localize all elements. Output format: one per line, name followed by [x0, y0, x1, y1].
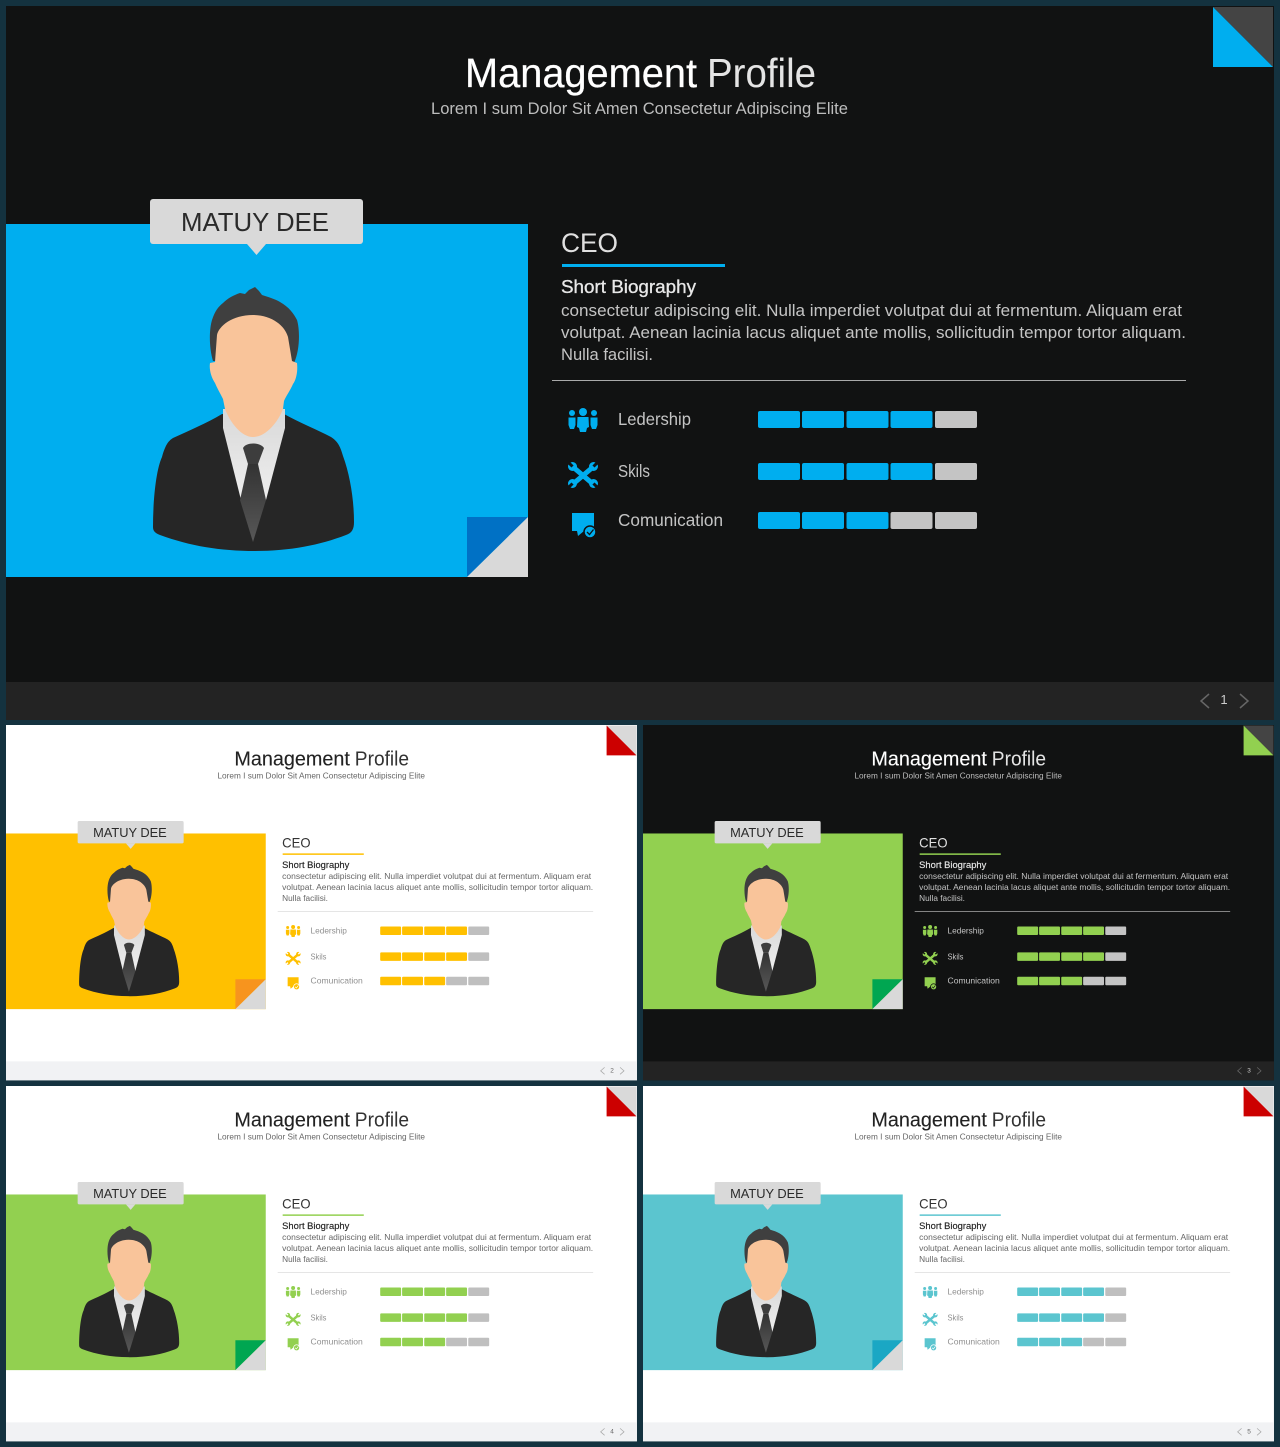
title: Management [871, 748, 987, 770]
photo panel [643, 833, 903, 1009]
subtitle: Lorem I sum Dolor Sit Amen Consectetur Adipiscing Elite [431, 99, 848, 118]
title: Management [234, 748, 350, 770]
biography text: volutpat. Aenean lacinia lacus aliquet ante mollis, sollicitudin tempor tortor aliquam. [282, 1243, 593, 1253]
role underline [562, 264, 725, 267]
biography text: consectetur adipiscing elit. Nulla imperdiet volutpat dui at fermentum. Aliquam erat [919, 871, 1229, 881]
title [465, 50, 816, 96]
biography heading: Short Biography [561, 277, 696, 297]
bar: communication [1017, 1338, 1126, 1346]
icon: person [716, 1226, 816, 1357]
biography text: consectetur adipiscing elit. Nulla imperdiet volutpat dui at fermentum. Aliquam erat [919, 1232, 1229, 1242]
icon: communication [925, 977, 937, 990]
footer bar [6, 1061, 637, 1080]
corner fold [607, 725, 636, 755]
biography text: Nulla facilisi. [561, 345, 653, 364]
subtitle: Lorem I sum Dolor Sit Amen Consectetur Adipiscing Elite [217, 1132, 425, 1142]
corner fold [607, 1086, 636, 1116]
label: communication: Comunication [948, 976, 1000, 986]
bar: communication [1017, 977, 1126, 985]
pagination [601, 1428, 624, 1435]
biography text: Nulla facilisi. [282, 893, 328, 903]
role underline [283, 853, 364, 855]
name tag: MATUY DEE [181, 207, 329, 237]
icon: person [153, 287, 354, 551]
label: skills: Skils [948, 951, 964, 961]
bar: skills [1017, 1313, 1126, 1322]
title [871, 1109, 1046, 1131]
pagination: 5 [1247, 1428, 1251, 1435]
label: communication: Comunication [311, 976, 363, 986]
biography text: volutpat. Aenean lacinia lacus aliquet ante mollis, sollicitudin tempor tortor aliquam. [561, 323, 1186, 342]
title: Profile [355, 1109, 409, 1131]
icon: leadership [568, 408, 598, 432]
icon: leadership [286, 925, 300, 937]
panel corner fold [467, 517, 528, 577]
pagination: 3 [1247, 1067, 1251, 1074]
title: Management [465, 50, 698, 96]
biography text [919, 1232, 1230, 1264]
biography text [282, 1232, 593, 1264]
role underline [920, 1214, 1001, 1216]
subtitle: Lorem I sum Dolor Sit Amen Consectetur Adipiscing Elite [854, 1132, 1062, 1142]
panel corner fold [872, 1340, 903, 1370]
panel corner fold [872, 979, 903, 1009]
biography text: volutpat. Aenean lacinia lacus aliquet ante mollis, sollicitudin tempor tortor aliquam. [919, 1243, 1230, 1253]
corner fold [1244, 725, 1273, 755]
icon: leadership [923, 925, 937, 937]
title: Profile [992, 1109, 1046, 1131]
title: Profile [707, 50, 816, 96]
bar: leadership [1017, 1288, 1126, 1296]
name tag [715, 821, 821, 849]
role underline [920, 853, 1001, 855]
label: skills: Skils [311, 951, 327, 961]
title [234, 748, 409, 770]
biography text: consectetur adipiscing elit. Nulla imperdiet volutpat dui at fermentum. Aliquam erat [282, 871, 592, 881]
footer bar [643, 1422, 1274, 1441]
slide 2: white with yellow accent [6, 725, 637, 1080]
biography text [919, 871, 1230, 903]
bar: skills [380, 952, 489, 961]
label: communication: Comunication [618, 510, 723, 530]
bar: leadership [380, 927, 489, 935]
biography text: volutpat. Aenean lacinia lacus aliquet ante mollis, sollicitudin tempor tortor aliquam. [282, 882, 593, 892]
icon: skills [286, 1313, 301, 1326]
slide 1: large dark blue profile [6, 6, 1274, 720]
biography text [282, 871, 593, 903]
label: leadership: Ledership [618, 409, 691, 429]
footer bar [6, 1422, 637, 1441]
photo panel [6, 833, 266, 1009]
icon: person [716, 865, 816, 996]
pagination: 1 [1220, 692, 1228, 707]
pagination [1201, 692, 1248, 708]
bar: skills [1017, 952, 1126, 961]
biography text: consectetur adipiscing elit. Nulla imperdiet volutpat dui at fermentum. Aliquam erat [561, 301, 1182, 320]
biography heading: Short Biography [919, 1221, 987, 1231]
pagination [1238, 1067, 1261, 1074]
corner fold [1244, 1086, 1273, 1116]
icon: skills [923, 1313, 938, 1326]
label: communication: Comunication [948, 1337, 1000, 1347]
name tag [78, 1182, 184, 1210]
pagination [1238, 1428, 1261, 1435]
icon: communication [288, 1338, 300, 1351]
bar: leadership [1017, 927, 1126, 935]
name tag: MATUY DEE [730, 1186, 804, 1201]
footer bar [6, 682, 1274, 720]
bar: communication [758, 512, 977, 529]
title: Profile [355, 748, 409, 770]
biography text: Nulla facilisi. [282, 1254, 328, 1264]
pagination [601, 1067, 624, 1074]
bar: skills [380, 1313, 489, 1322]
icon: leadership [923, 1286, 937, 1298]
bar: leadership [380, 1288, 489, 1296]
role heading: CEO [919, 1196, 948, 1211]
icon: communication [925, 1338, 937, 1351]
label: skills: Skils [618, 461, 650, 481]
icon: skills [286, 952, 301, 965]
biography heading: Short Biography [282, 1221, 350, 1231]
title: Management [871, 1109, 987, 1131]
bar: leadership [758, 411, 977, 428]
slide 5: white with teal accent [643, 1086, 1274, 1441]
photo panel [6, 224, 528, 577]
footer bar [643, 1061, 1274, 1080]
biography text: Nulla facilisi. [919, 893, 965, 903]
biography heading: Short Biography [282, 860, 350, 870]
biography heading: Short Biography [919, 860, 987, 870]
label: communication: Comunication [311, 1337, 363, 1347]
label: skills: Skils [311, 1312, 327, 1322]
icon: communication [288, 977, 300, 990]
biography text [561, 301, 1186, 364]
role underline [283, 1214, 364, 1216]
name tag [150, 199, 363, 255]
role heading: CEO [282, 835, 311, 850]
icon: communication [572, 513, 596, 538]
photo panel [6, 1194, 266, 1370]
name tag: MATUY DEE [93, 1186, 167, 1201]
title: Profile [992, 748, 1046, 770]
role heading: CEO [561, 228, 618, 258]
biography text: Nulla facilisi. [919, 1254, 965, 1264]
label: leadership: Ledership [311, 925, 347, 935]
name tag: MATUY DEE [93, 825, 167, 840]
subtitle: Lorem I sum Dolor Sit Amen Consectetur Adipiscing Elite [217, 771, 425, 781]
bar: communication [380, 1338, 489, 1346]
title: Management [234, 1109, 350, 1131]
label: skills: Skils [948, 1312, 964, 1322]
slide 3: dark with green accent [643, 725, 1274, 1080]
icon: person [79, 1226, 179, 1357]
biography text: consectetur adipiscing elit. Nulla imperdiet volutpat dui at fermentum. Aliquam erat [282, 1232, 592, 1242]
label: leadership: Ledership [311, 1286, 347, 1296]
corner fold [1213, 7, 1273, 67]
pagination: 2 [610, 1067, 614, 1074]
title [871, 748, 1046, 770]
subtitle: Lorem I sum Dolor Sit Amen Consectetur Adipiscing Elite [854, 771, 1062, 781]
name tag [78, 821, 184, 849]
name tag [715, 1182, 821, 1210]
panel corner fold [235, 979, 266, 1009]
icon: person [79, 865, 179, 996]
pagination: 4 [610, 1428, 614, 1435]
icon: skills [923, 952, 938, 965]
biography text: volutpat. Aenean lacinia lacus aliquet ante mollis, sollicitudin tempor tortor aliquam. [919, 882, 1230, 892]
role heading: CEO [282, 1196, 311, 1211]
icon: leadership [286, 1286, 300, 1298]
role heading: CEO [919, 835, 948, 850]
bar: communication [380, 977, 489, 985]
label: leadership: Ledership [948, 925, 984, 935]
label: leadership: Ledership [948, 1286, 984, 1296]
slide 4: white with green accent [6, 1086, 637, 1441]
icon: skills [568, 462, 598, 488]
name tag: MATUY DEE [730, 825, 804, 840]
bar: skills [758, 463, 977, 480]
title [234, 1109, 409, 1131]
panel corner fold [235, 1340, 266, 1370]
photo panel [643, 1194, 903, 1370]
